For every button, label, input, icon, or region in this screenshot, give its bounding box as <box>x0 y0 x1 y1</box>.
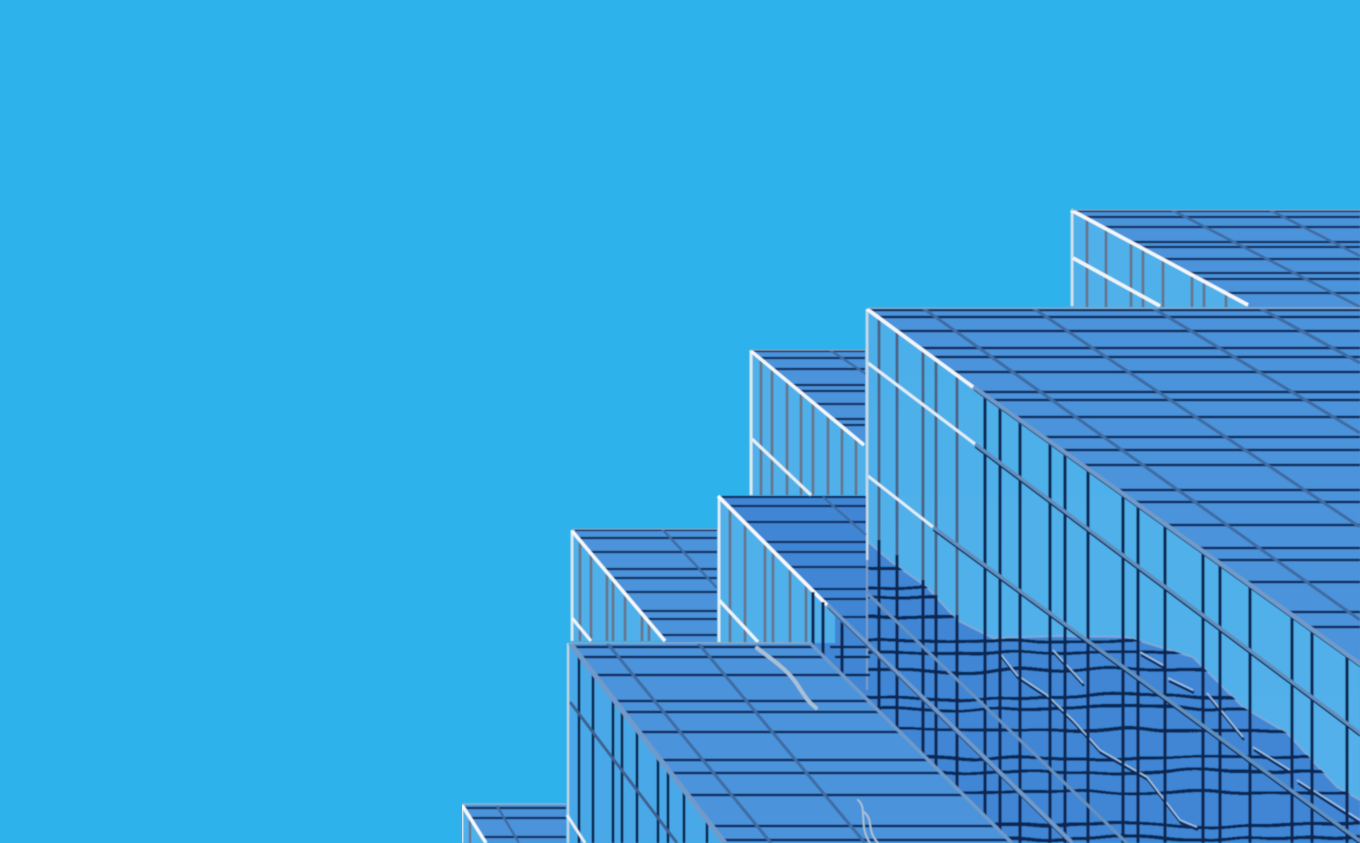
building: photographed tower <box>462 200 1360 843</box>
block: lower left upper tier <box>572 520 717 645</box>
reflection on facade <box>866 540 1360 843</box>
block: large tier roof <box>867 308 1360 667</box>
block: upper middle tier <box>751 340 866 500</box>
facade floor bands <box>933 444 1360 841</box>
wavy reflected floor lines <box>850 567 1360 838</box>
block: top right tier <box>1071 200 1360 312</box>
reflected roofline traces <box>1001 653 1360 830</box>
block: lower front tier <box>567 640 1012 843</box>
block: bottom left tier <box>462 804 566 843</box>
facade mullions <box>876 397 1350 843</box>
photo: glass tower against sky <box>462 208 1360 843</box>
block: middle tier roof and facade <box>718 490 1127 843</box>
block: large tier facade <box>850 300 1360 843</box>
reflection squiggles on roof <box>757 648 878 843</box>
